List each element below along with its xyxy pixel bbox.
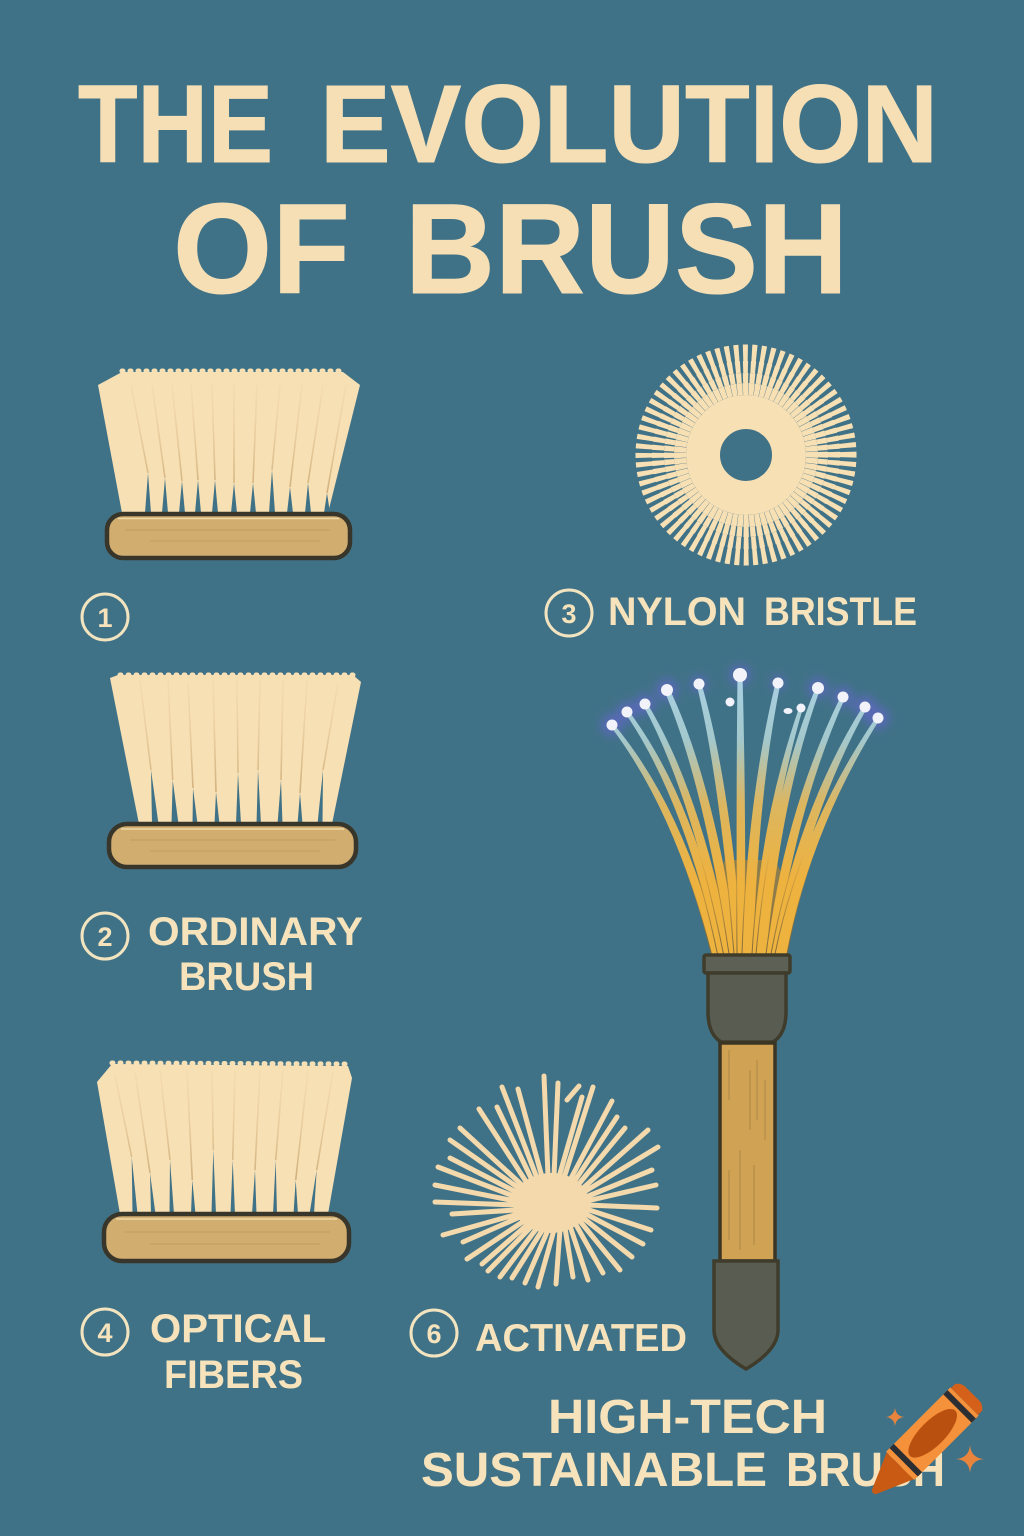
brush ferrule [708, 973, 786, 1042]
label: high-tech sustainable brush [421, 1391, 945, 1497]
icon: large sparkle [956, 1445, 984, 1473]
label: high-tech sustainable brush: HIGH-TECH [548, 1391, 827, 1444]
nylon bristle disc [644, 353, 848, 557]
label 4: optical fibers: OPTICAL [150, 1307, 326, 1351]
icon: crayon [859, 1380, 986, 1507]
title: THE [78, 63, 273, 186]
label: high-tech sustainable brush: BRUSH [786, 1444, 945, 1497]
fiber shadow [714, 860, 787, 954]
brush collar [704, 955, 790, 973]
label 6: activated: 6 [426, 1319, 442, 1349]
optical fibers [610, 675, 880, 954]
fiber glow [601, 665, 889, 736]
label 6: activated [411, 1310, 687, 1360]
label 3: nylon bristle: BRISTLE [764, 590, 917, 634]
label 4: optical fibers: 4 [97, 1318, 113, 1348]
label 2: ordinary brush [82, 910, 363, 999]
label 3: nylon bristle: NYLON [608, 590, 746, 634]
label 1 [82, 594, 128, 640]
high-tech fiber optic brush [601, 665, 889, 1369]
title: EVOLUTION [320, 63, 938, 186]
title: BRUSH [405, 178, 848, 321]
label 3: nylon bristle [546, 590, 917, 636]
label 2: ordinary brush: BRUSH [179, 955, 314, 999]
label 4: optical fibers: FIBERS [164, 1353, 303, 1397]
activated burst [435, 1076, 658, 1287]
glowing fiber tips [606, 668, 884, 730]
label 2: ordinary brush: ORDINARY [148, 910, 363, 954]
label: high-tech sustainable brush: SUSTAINABLE [421, 1444, 767, 1497]
brush 1 [98, 371, 360, 558]
label 4: optical fibers [82, 1307, 326, 1397]
wood grain [729, 1050, 765, 1250]
label 2: ordinary brush: 2 [97, 922, 113, 952]
brush 2 [109, 675, 361, 867]
wooden handle [720, 1043, 775, 1261]
title [78, 63, 938, 321]
label 3: nylon bristle: 3 [561, 599, 577, 629]
label 6: activated: ACTIVATED [475, 1317, 687, 1360]
label 1: 1 [97, 603, 113, 633]
title: OF [173, 178, 350, 321]
brush 3 [97, 1063, 352, 1261]
icon: small sparkle [886, 1408, 904, 1426]
handle end cap [714, 1261, 778, 1369]
